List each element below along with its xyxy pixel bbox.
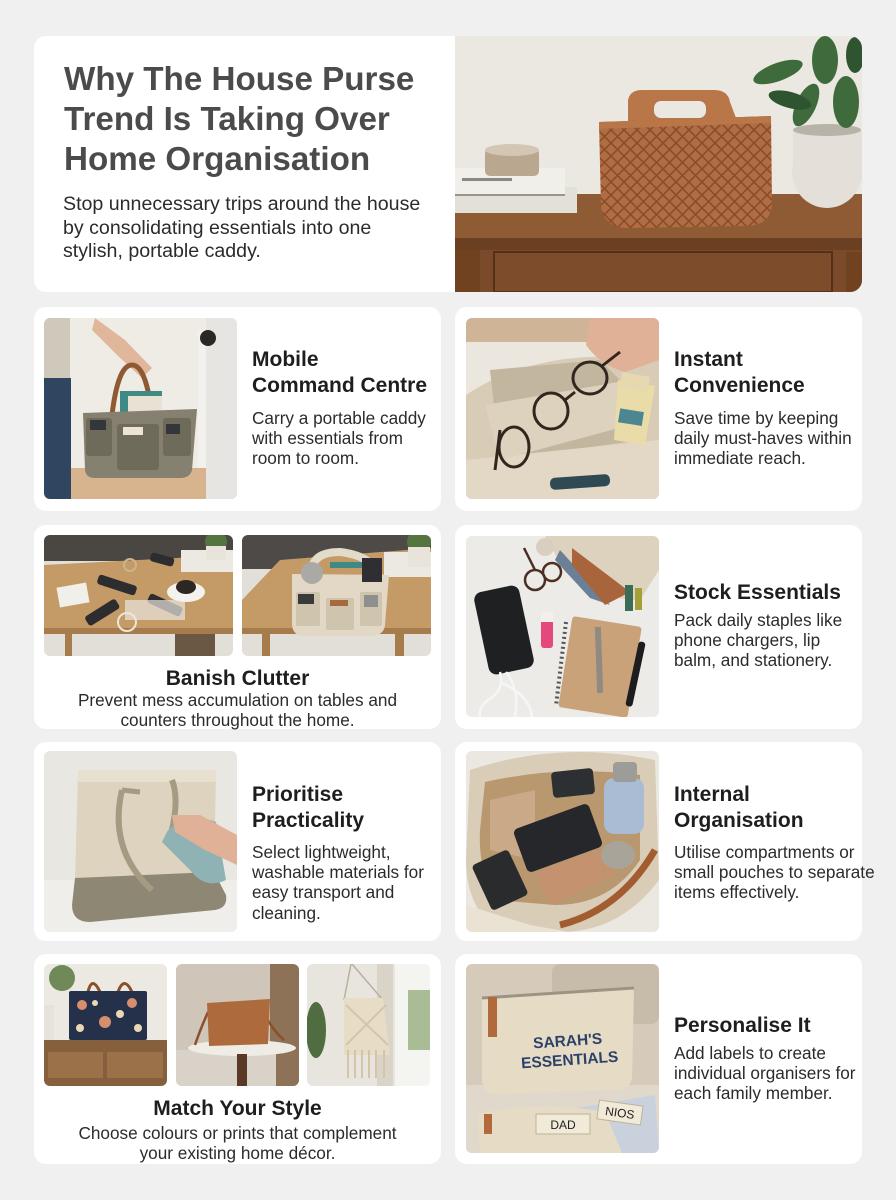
body text	[674, 408, 852, 468]
heading: Command Centre	[252, 374, 427, 396]
body text: each family member.	[674, 1083, 833, 1103]
body text	[252, 842, 424, 923]
body text: counters throughout the home.	[120, 710, 355, 730]
body text	[252, 408, 426, 468]
body text: Add labels to create	[674, 1043, 826, 1063]
body text: balm, and stationery.	[674, 650, 832, 670]
image: personalised pouches: ESSENTIALS	[521, 1049, 619, 1072]
body text: easy transport and	[252, 882, 394, 902]
body text: Save time by keeping	[674, 408, 838, 428]
body text: Pack daily staples like	[674, 610, 842, 630]
heading: Organisation	[674, 808, 804, 832]
panel: instant convenience	[455, 307, 862, 511]
hero image: woven leather caddy on a wooden table	[455, 36, 862, 292]
body text: small pouches to separate	[674, 862, 875, 882]
heading: Practicality	[252, 808, 364, 832]
body text	[78, 690, 397, 730]
panel: match your style	[34, 954, 441, 1164]
body text: daily must-haves within	[674, 428, 852, 448]
image: macrame bag by a window	[307, 964, 430, 1086]
heading: Internal	[674, 783, 750, 806]
subtitle	[63, 193, 420, 262]
body text: Prevent mess accumulation on tables and	[78, 690, 397, 710]
heading: Prioritise	[252, 783, 343, 806]
body text	[78, 1123, 397, 1163]
panel: mobile command centre	[34, 307, 441, 511]
panel: internal organisation	[455, 742, 862, 941]
heading	[252, 348, 427, 396]
heading: Stock Essentials	[674, 580, 841, 604]
image: cluttered table	[44, 535, 233, 656]
image: tan crossbody bag on side table	[176, 964, 299, 1086]
title: Trend Is Taking Over	[64, 101, 390, 138]
body text: Carry a portable caddy	[252, 408, 426, 428]
body text	[674, 1043, 856, 1103]
panel: stock essentials	[455, 525, 862, 729]
body text: items effectively.	[674, 882, 799, 902]
panel: banish clutter	[34, 525, 441, 729]
heading: Personalise It	[674, 1014, 811, 1037]
body text: cleaning.	[252, 903, 321, 923]
image: personalised pouches: NIOS	[604, 1104, 635, 1122]
body text: room to room.	[252, 448, 359, 468]
subtitle: stylish, portable caddy.	[63, 240, 261, 262]
body text: Select lightweight,	[252, 842, 391, 862]
panel: prioritise practicality	[34, 742, 441, 941]
body text	[674, 610, 842, 670]
heading: Convenience	[674, 374, 805, 396]
heading: Instant	[674, 348, 743, 371]
body text: washable materials for	[252, 862, 424, 882]
body text: phone chargers, lip	[674, 630, 820, 650]
heading	[252, 783, 364, 832]
heading: Banish Clutter	[166, 666, 309, 690]
heading: Mobile	[252, 348, 318, 371]
body text: with essentials from	[252, 428, 403, 448]
subtitle: Stop unnecessary trips around the house	[63, 193, 420, 215]
image: floral tote on sideboard	[44, 964, 167, 1086]
image: personalised pouches	[466, 964, 659, 1153]
subtitle: by consolidating essentials into one	[63, 217, 371, 239]
heading: Match Your Style	[153, 1097, 322, 1120]
title: Home Organisation	[64, 141, 370, 178]
image: tidy caddy on table	[242, 535, 431, 656]
body text: Choose colours or prints that complement	[78, 1123, 397, 1143]
heading	[674, 783, 804, 832]
body text	[674, 842, 875, 902]
body text: immediate reach.	[674, 448, 806, 468]
body text: individual organisers for	[674, 1063, 856, 1083]
image: organised bag interior	[466, 751, 659, 932]
panel: personalise it	[455, 954, 862, 1164]
image: personalised pouches: DAD	[550, 1118, 576, 1132]
image: glasses and cream in a canvas caddy	[466, 318, 659, 499]
image: person carrying caddy	[44, 318, 237, 499]
body text: Utilise compartments or	[674, 842, 855, 862]
image: wiping a canvas tote	[44, 751, 237, 932]
heading	[674, 348, 805, 396]
panel: hero	[34, 36, 862, 292]
body text: your existing home décor.	[140, 1143, 335, 1163]
image: phone, lip balm and notebook flat lay	[466, 536, 659, 717]
title	[64, 61, 414, 178]
image: personalised pouches: SARAH'S	[533, 1031, 603, 1052]
title: Why The House Purse	[64, 61, 414, 98]
